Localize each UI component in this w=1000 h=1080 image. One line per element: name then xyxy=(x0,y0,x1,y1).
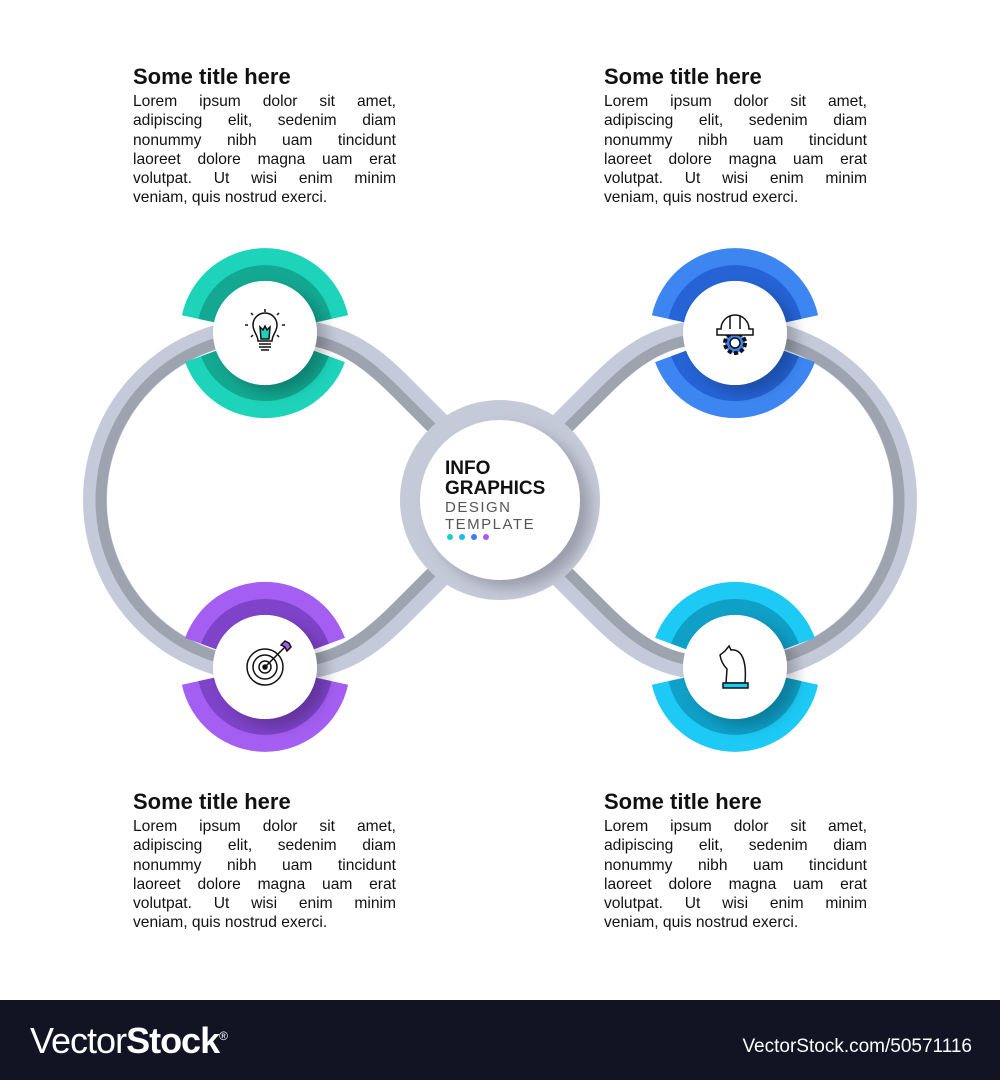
icon: light bulb xyxy=(245,309,285,350)
text block: bottom left: veniam, quis nostrud exerci. xyxy=(133,914,327,931)
text block: bottom left: volutpat. Ut wisi enim minim xyxy=(133,895,396,912)
text block: bottom right: adipiscing elit, sedenim diam xyxy=(604,837,867,854)
icon: target xyxy=(247,641,291,685)
text block: top left: Some title here xyxy=(133,64,291,89)
text block: top right xyxy=(604,64,867,206)
text block: top left: nonummy nibh uam tincidunt xyxy=(133,132,396,149)
footer logo: VectorStock® xyxy=(30,1020,227,1061)
center title: GRAPHICS xyxy=(445,478,545,499)
text block: top right: Lorem ipsum dolor sit amet, xyxy=(604,93,867,110)
footer bar xyxy=(0,1000,1000,1080)
text block: top right: nonummy nibh uam tincidunt xyxy=(604,132,867,149)
text block: bottom right: Some title here xyxy=(604,789,762,814)
icon: chess knight xyxy=(720,646,748,688)
text block: top left xyxy=(133,64,396,206)
text block: top right: veniam, quis nostrud exerci. xyxy=(604,189,798,206)
node: top left (teal) xyxy=(182,248,348,418)
text block: bottom left: laoreet dolore magna uam erat xyxy=(133,876,396,893)
text block: bottom left: Some title here xyxy=(133,789,291,814)
node: top right (blue) xyxy=(652,248,818,418)
center title: TEMPLATE xyxy=(445,516,535,533)
text block: bottom right: volutpat. Ut wisi enim minim xyxy=(604,895,867,912)
text block: top right: laoreet dolore magna uam erat xyxy=(604,151,867,168)
text block: bottom right xyxy=(604,789,867,931)
text block: bottom right: nonummy nibh uam tincidunt xyxy=(604,857,867,874)
text block: top right: adipiscing elit, sedenim diam xyxy=(604,112,867,129)
text block: bottom right: veniam, quis nostrud exerci. xyxy=(604,914,798,931)
node: bottom left (purple) xyxy=(182,582,348,752)
text block: bottom right: laoreet dolore magna uam erat xyxy=(604,876,867,893)
text block: bottom left xyxy=(133,789,396,931)
text block: top left: veniam, quis nostrud exerci. xyxy=(133,189,327,206)
text block: bottom left: nonummy nibh uam tincidunt xyxy=(133,857,396,874)
text block: bottom left: Lorem ipsum dolor sit amet, xyxy=(133,818,396,835)
center title: DESIGN xyxy=(445,499,512,516)
text block: top right: Some title here xyxy=(604,64,762,89)
text block: top left: Lorem ipsum dolor sit amet, xyxy=(133,93,396,110)
text block: top left: volutpat. Ut wisi enim minim xyxy=(133,170,396,187)
text block: top right: volutpat. Ut wisi enim minim xyxy=(604,170,867,187)
icon: hard hat gear xyxy=(717,315,753,353)
text block: top left: adipiscing elit, sedenim diam xyxy=(133,112,396,129)
text block: bottom right: Lorem ipsum dolor sit amet, xyxy=(604,818,867,835)
node: bottom right (cyan) xyxy=(652,582,818,752)
track xyxy=(95,330,905,670)
text block: bottom left: adipiscing elit, sedenim diam xyxy=(133,837,396,854)
text block: top left: laoreet dolore magna uam erat xyxy=(133,151,396,168)
center circle xyxy=(400,400,600,600)
center title xyxy=(445,458,545,540)
center title: INFO xyxy=(445,458,490,479)
footer url: VectorStock.com/50571116 xyxy=(742,1036,972,1057)
